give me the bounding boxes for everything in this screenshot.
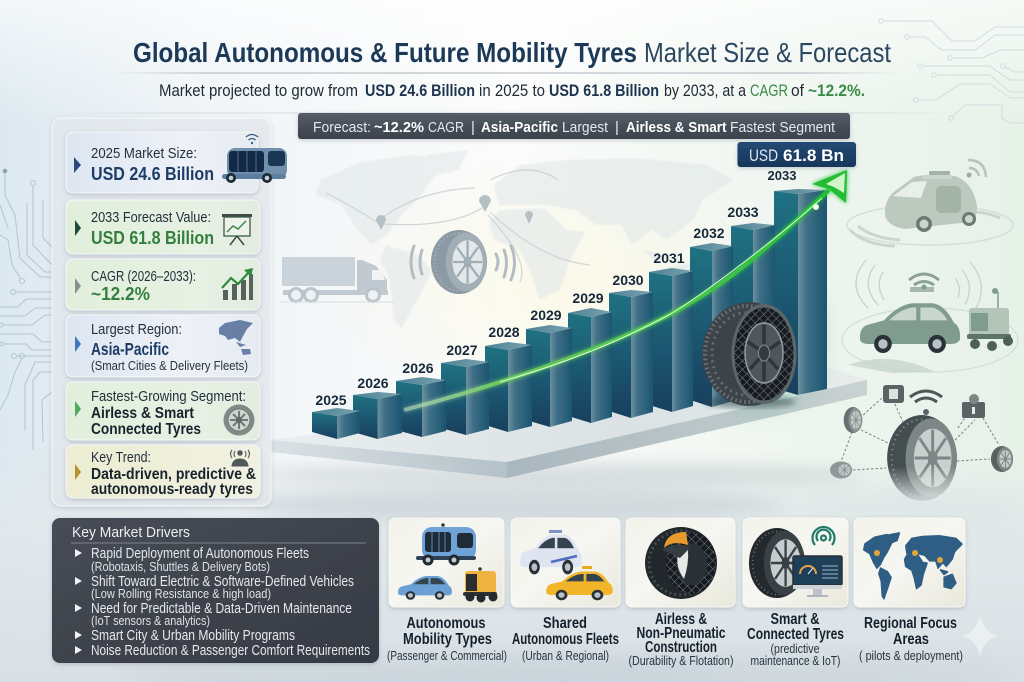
- icon: world map with pins: [864, 533, 962, 599]
- bar 2026 first: 2026: [357, 375, 389, 391]
- card: airless construction: Non-Pneumatic: [636, 625, 726, 642]
- card: largest region: Asia-Pacific: [91, 339, 169, 359]
- card: smart connected tyres: [743, 518, 848, 668]
- ghost world map with routes: [315, 150, 734, 328]
- subtitle: Market projected to grow from: [159, 81, 358, 100]
- bar 2026 first: [353, 375, 402, 439]
- icon: white robotaxi: [520, 530, 582, 574]
- card: shared autonomous fleets: Shared: [543, 615, 587, 632]
- driver: electric vehicles: (Low Rolling Resistance & high load): [91, 586, 271, 601]
- bar 2030: 2030: [612, 272, 644, 288]
- subtitle: USD 24.6 Billion: [365, 81, 475, 100]
- bar 2025: [312, 392, 360, 439]
- icon: tyre badge: [224, 404, 254, 436]
- subtitle: by 2033, at a: [664, 81, 746, 100]
- top forecast banner: |: [615, 119, 619, 136]
- icon: ghost autonomous car with sensor rings: [847, 160, 1013, 246]
- card: shared autonomous fleets: [511, 518, 620, 663]
- top forecast banner: ~12.2%: [374, 119, 424, 136]
- card: CAGR: [66, 259, 260, 310]
- driver: noise reduction: Noise Reduction & Passenger Comfort Requirements: [91, 643, 370, 659]
- card: 2033 forecast value: [66, 200, 260, 254]
- top forecast banner: Asia-Pacific: [481, 119, 558, 136]
- icon: ghost robotaxi and delivery robot: [842, 260, 1018, 373]
- value badge: [738, 142, 856, 167]
- icon: delivery bot: [463, 567, 498, 602]
- subtitle: CAGR: [750, 81, 788, 100]
- driver: maintenance: Need for Predictable & Data-Driven Maintenance: [91, 601, 352, 617]
- bar 2033 final: [768, 168, 827, 395]
- card: airless construction: (Durability & Flotation): [628, 654, 734, 668]
- bar 2032: [690, 225, 733, 407]
- top forecast banner: Forecast:: [313, 119, 371, 136]
- top forecast banner: Largest: [562, 119, 609, 136]
- card: 2033 forecast value: 2033 Forecast Value:: [91, 210, 211, 226]
- icon: wireless signal: [812, 527, 835, 545]
- icon: ghost truck: [280, 257, 395, 302]
- chart platform: [260, 368, 867, 487]
- panel: key metrics: [52, 118, 287, 506]
- top forecast banner: |: [471, 119, 475, 136]
- card: fastest-growing segment: [66, 382, 260, 440]
- card: autonomous mobility types: Mobility Types: [403, 631, 492, 648]
- bar 2033: 2033: [727, 204, 759, 220]
- card: CAGR: ~12.2%: [91, 283, 150, 304]
- title: Global Autonomous & Future Mobility Tyres: [133, 37, 637, 68]
- card: regional focus areas: [854, 518, 965, 663]
- icon: shuttle: [222, 134, 287, 183]
- driver: electric vehicles: Shift Toward Electric & Software-Defined Vehicles: [91, 574, 354, 590]
- card: shared autonomous fleets: Autonomous Fleets: [512, 631, 619, 648]
- icon: Asia map: [219, 320, 253, 355]
- driver: maintenance: [75, 601, 352, 628]
- card: largest region: (Smart Cities & Delivery Fleets): [91, 358, 248, 373]
- card: regional focus areas: Regional Focus: [864, 615, 957, 632]
- icon: growth chart: [222, 268, 253, 300]
- top forecast banner: Airless & Smart: [626, 119, 727, 136]
- card: regional focus areas: Areas: [893, 631, 929, 648]
- icon: ghost tyre with vibration waves: [411, 230, 514, 294]
- card: 2025 market size: [66, 132, 287, 193]
- icon: presentation board: [222, 214, 252, 245]
- card: fastest-growing segment: Fastest-Growing Segment:: [91, 389, 246, 405]
- card: key trend: [66, 445, 260, 498]
- panel: key market drivers: Key Market Drivers: [72, 524, 190, 541]
- card: 2025 market size: 2025 Market Size:: [91, 146, 197, 162]
- card: fastest-growing segment: Connected Tyres: [91, 421, 201, 438]
- card: largest region: [66, 315, 260, 377]
- card: airless construction: Construction: [645, 639, 717, 656]
- card: airless construction: [626, 518, 735, 668]
- icon: blue shuttle: [416, 523, 476, 566]
- card: fastest-growing segment: Airless & Smart: [91, 405, 195, 422]
- card: smart connected tyres: Smart &: [770, 611, 820, 628]
- value badge: USD: [749, 146, 778, 165]
- icon: monitor dashboard: [793, 556, 842, 597]
- circuit traces left: [0, 169, 52, 450]
- top forecast banner: CAGR: [428, 119, 464, 136]
- card: autonomous mobility types: (Passenger & Commercial): [387, 649, 507, 663]
- icon: yellow taxi: [546, 566, 613, 600]
- card: key trend: Key Trend:: [91, 450, 151, 466]
- card: 2033 forecast value: USD 61.8 Billion: [91, 227, 214, 248]
- title: Market Size & Forecast: [644, 37, 891, 68]
- icon: blue car: [398, 576, 452, 600]
- driver: smart city: Smart City & Urban Mobility Programs: [91, 628, 295, 644]
- icon: connected tyre network: [830, 385, 1013, 501]
- bar 2027: [441, 342, 489, 435]
- card: autonomous mobility types: Autonomous: [406, 615, 486, 632]
- icon: airless mesh tyre: [702, 302, 796, 408]
- top forecast banner: Fastest Segment: [730, 119, 836, 136]
- bar 2025: 2025: [315, 392, 347, 408]
- card: smart connected tyres: maintenance & IoT): [750, 654, 840, 668]
- bar chart: [260, 168, 867, 487]
- panel: key market drivers: [52, 518, 379, 663]
- subtitle: ~12.2%.: [808, 81, 865, 100]
- subtitle: in 2025 to: [479, 81, 545, 100]
- bar 2028: 2028: [488, 324, 520, 340]
- driver: autonomous fleets: Rapid Deployment of Autonomous Fleets: [91, 546, 309, 562]
- card: 2025 market size: USD 24.6 Billion: [91, 163, 214, 184]
- card: smart connected tyres: Connected Tyres: [747, 626, 844, 643]
- card: airless construction: Airless &: [655, 611, 707, 628]
- driver: autonomous fleets: [75, 546, 309, 574]
- card: largest region: Largest Region:: [91, 322, 182, 338]
- card: regional focus areas: ( pilots & deployment): [859, 649, 963, 663]
- bar 2030: [609, 272, 653, 418]
- bar 2026 second: [396, 360, 446, 437]
- icon: smart tyre: [749, 528, 805, 598]
- bar 2028: [485, 324, 532, 432]
- icon: airless cutaway tyre: [645, 527, 717, 599]
- bar 2029 first: [526, 307, 572, 427]
- subtitle: [159, 81, 865, 100]
- bar 2029 first: 2029: [530, 307, 562, 323]
- bar 2029 second: 2029: [572, 290, 604, 306]
- bar 2031: 2031: [653, 250, 685, 266]
- subtitle: USD 61.8 Billion: [549, 81, 659, 100]
- bar 2026 second: 2026: [402, 360, 434, 376]
- card: autonomous mobility types: [387, 518, 507, 663]
- subtitle: of: [791, 81, 804, 100]
- driver: maintenance: (IoT sensors & analytics): [91, 613, 210, 628]
- driver: autonomous fleets: (Robotaxis, Shuttles & Delivery Bots): [91, 559, 270, 574]
- card: CAGR: CAGR (2026–2033):: [91, 269, 196, 285]
- top forecast banner: [298, 113, 850, 139]
- driver: electric vehicles: [75, 574, 354, 601]
- bar 2027: 2027: [446, 342, 478, 358]
- bar 2032: 2032: [693, 225, 725, 241]
- bar 2029 second: [568, 290, 612, 423]
- card: shared autonomous fleets: (Urban & Regional): [522, 649, 609, 663]
- value badge: 61.8 Bn: [783, 146, 844, 165]
- bar 2033: [727, 204, 775, 405]
- icon: data signal: [230, 450, 250, 466]
- card: key trend: Data-driven, predictive &: [91, 466, 256, 483]
- bar 2031: [649, 250, 693, 412]
- circuit traces top right: [879, 19, 1024, 123]
- card: key trend: autonomous-ready tyres: [91, 481, 253, 498]
- bar 2033 final: 2033: [768, 168, 796, 183]
- card: smart connected tyres: (predictive: [770, 642, 820, 656]
- growth arrow: [404, 170, 847, 410]
